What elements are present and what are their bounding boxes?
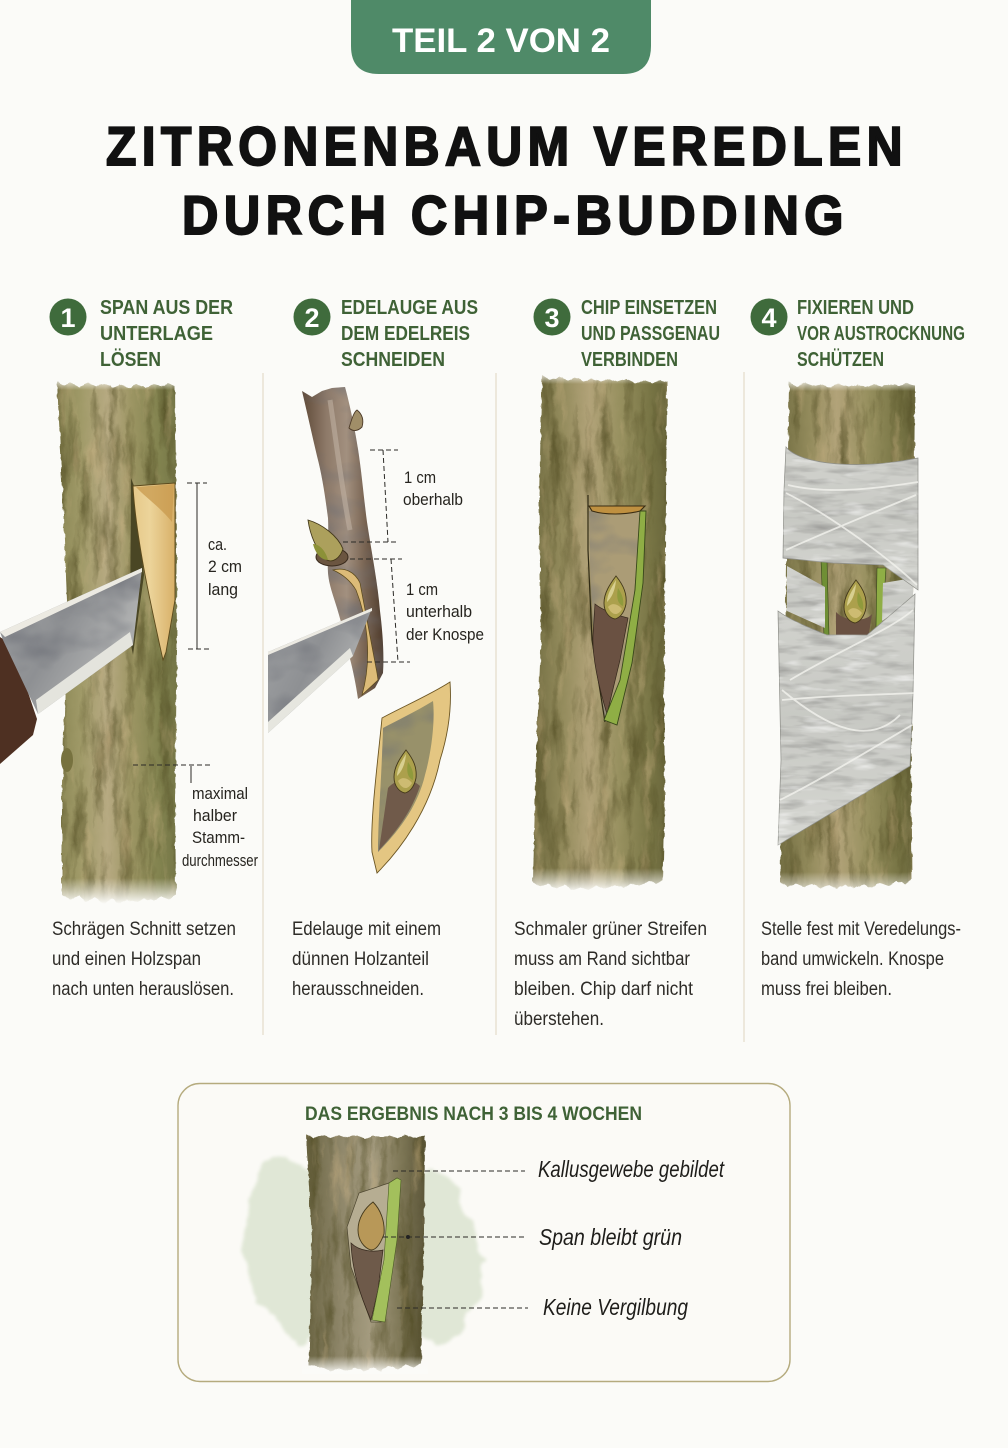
illustration: step 1 trunk with cut and knife — [0, 378, 184, 904]
step 1 heading: 1 — [60, 303, 76, 333]
panel heading: DAS ERGEBNIS NACH 3 BIS 4 WOCHEN — [305, 1104, 642, 1125]
brown stock under bud — [593, 604, 628, 714]
result bud — [358, 1202, 384, 1250]
dimension: 1 cm unterhalb der Knospe — [350, 559, 484, 662]
step 1 heading: LÖSEN — [100, 348, 161, 371]
step 2 heading: 2 — [304, 303, 320, 333]
chip left outline — [588, 495, 605, 722]
left tape in window — [787, 566, 825, 628]
bud — [844, 580, 866, 623]
step 3 text: überstehen. — [514, 1009, 604, 1030]
illustration: step 2 twig with bud and knife — [268, 387, 383, 733]
bud base leaf — [313, 544, 328, 560]
step 2 heading: SCHNEIDEN — [341, 349, 445, 371]
chip bark — [378, 701, 434, 852]
step 1 text: und einen Holzspan — [52, 949, 201, 970]
trunk 1 bottom fade — [52, 878, 184, 904]
step 1 heading: UNTERLAGE — [100, 323, 213, 345]
step 4 heading: SCHÜTZEN — [797, 348, 884, 371]
dimension: maximal halber Stammdurchmesser: maximal — [192, 784, 248, 803]
dimension: 1 cm unterhalb der Knospe: 1 cm — [406, 580, 438, 599]
chip bud — [394, 750, 416, 793]
trunk 4 bottom fade — [774, 872, 918, 898]
step 4 heading: FIXIEREN UND — [797, 297, 914, 319]
blade top bevel — [0, 568, 142, 637]
step 1 heading — [50, 297, 233, 371]
knife handle — [0, 637, 37, 764]
chip brown base — [379, 780, 420, 850]
panel frame — [178, 1084, 790, 1382]
chip top cut — [589, 506, 645, 514]
main bud — [308, 520, 343, 561]
dimension: maximal halber Stammdurchmesser: Stamm- — [192, 828, 245, 847]
step 2 text: dünnen Holzanteil — [292, 949, 429, 970]
exposed wood cut — [133, 483, 175, 660]
result trunk — [306, 1134, 425, 1371]
dimension: 1 cm oberhalb: 1 cm — [404, 468, 436, 487]
step 2 text: Edelauge mit einem — [292, 919, 441, 940]
callout: Kallusgewebe gebildet: Kallusgewebe gebildet — [538, 1156, 725, 1182]
step 4 heading: 4 — [761, 303, 777, 333]
column dividers — [263, 372, 744, 1042]
blade bottom bevel — [36, 632, 133, 714]
knife 2 top bevel — [268, 608, 372, 655]
step 3 text: bleiben. Chip darf nicht — [514, 979, 694, 1000]
chip brown base — [836, 612, 872, 640]
dimension: maximal halber Stammdurchmesser: halber — [193, 806, 237, 825]
callout: Span bleibt grün — [383, 1224, 682, 1250]
dimension: ca. 2 cm lang: lang — [208, 580, 238, 599]
right tape in window — [882, 578, 913, 621]
slit beside cut — [130, 478, 144, 655]
trunk 4 — [780, 382, 915, 889]
dimension: 1 cm unterhalb der Knospe: unterhalb — [406, 602, 472, 621]
bud — [604, 576, 626, 619]
cut shading — [136, 484, 174, 522]
step 3 heading: UND PASSGENAU — [581, 323, 720, 345]
dimension: 1 cm unterhalb der Knospe: der Knospe — [406, 625, 484, 644]
step 1 text: nach unten herauslösen. — [52, 979, 234, 1000]
green cambium strip — [604, 511, 646, 725]
callout: Span bleibt grün: Span bleibt grün — [539, 1224, 682, 1250]
trunk 4 top fade — [784, 379, 920, 391]
green strip right — [876, 568, 886, 628]
panel: result after 3 to 4 weeks — [178, 1084, 790, 1382]
callus tissue rim — [347, 1178, 397, 1322]
illustration: step 3 trunk with inserted chip — [526, 372, 672, 892]
callout: Keine Vergilbung: Keine Vergilbung — [543, 1294, 688, 1320]
step 4 text: muss frei bleiben. — [761, 979, 892, 1000]
knife blade 2 — [268, 608, 372, 733]
step 2 heading: EDELAUGE AUS — [341, 297, 478, 319]
trunk 3 bottom fade — [526, 868, 672, 892]
peeled wood on twig — [333, 569, 378, 695]
knife 2 lower bevel — [268, 648, 353, 733]
step 3 heading: VERBINDEN — [581, 349, 678, 371]
step 3 text: Schmaler grüner Streifen — [514, 919, 707, 940]
step 4 text: band umwickeln. Knospe — [761, 949, 944, 970]
step 4 text: Stelle fest mit Veredelungs- — [761, 919, 961, 940]
twig highlight — [330, 400, 350, 530]
dimension: ca. 2 cm lang: ca. — [208, 535, 227, 554]
dimension: 1 cm oberhalb — [343, 450, 463, 542]
step 1 text: Schrägen Schnitt setzen — [52, 919, 236, 940]
dimension: maximal halber Stammdurchmesser — [133, 765, 258, 870]
step 2 text: herausschneiden. — [292, 979, 424, 1000]
twig — [302, 387, 383, 699]
title: ZITRONENBAUM VEREDLEN — [106, 115, 908, 177]
step 3 heading: 3 — [544, 303, 560, 333]
illustration: step 4 trunk wrapped in grafting tape — [774, 379, 920, 898]
chip wood — [372, 682, 451, 873]
step 2 heading — [294, 297, 478, 371]
green strip left — [821, 560, 829, 636]
dimension: 1 cm oberhalb: oberhalb — [403, 490, 463, 509]
lower tape wrap — [778, 594, 915, 845]
dimension: maximal halber Stammdurchmesser: durchmesser — [182, 851, 258, 870]
step 3 text: muss am Rand sichtbar — [514, 949, 691, 970]
trunk 3 top fade — [536, 372, 672, 384]
trunk 1 top fade — [50, 378, 182, 390]
header pill: TEIL 2 VON 2 — [392, 22, 610, 60]
step 2 text — [292, 919, 441, 1000]
brown stock — [351, 1243, 383, 1320]
step 2 heading: DEM EDELREIS — [341, 323, 470, 345]
tape overlap lines — [780, 482, 918, 800]
step 3 heading — [534, 297, 720, 371]
step 3 heading: CHIP EINSETZEN — [581, 297, 717, 319]
knife blade — [0, 568, 142, 714]
node on trunk — [61, 748, 73, 772]
step 1 text — [52, 919, 236, 1000]
step 3 text — [514, 919, 707, 1030]
chip bark — [589, 511, 645, 722]
trunk 3 — [533, 375, 667, 890]
illustration: cut-out chip — [372, 682, 451, 873]
dimension: ca. 2 cm lang: 2 cm — [208, 557, 242, 576]
upper tape wrap — [783, 447, 918, 590]
title: DURCH CHIP-BUDDING — [182, 184, 849, 246]
header pill — [351, 0, 651, 74]
trunk bottom fade — [302, 1356, 428, 1374]
title — [106, 115, 908, 246]
green strip — [372, 1178, 401, 1322]
step 1 heading: SPAN AUS DER — [100, 297, 233, 319]
bud collar — [316, 548, 348, 566]
trunk 1 — [57, 381, 177, 903]
green watercolour wash — [244, 1157, 484, 1341]
side bud on twig — [349, 410, 363, 431]
step 4 heading — [750, 297, 965, 371]
dimension: ca. 2 cm lang — [187, 483, 242, 649]
step 4 text — [761, 919, 961, 1000]
